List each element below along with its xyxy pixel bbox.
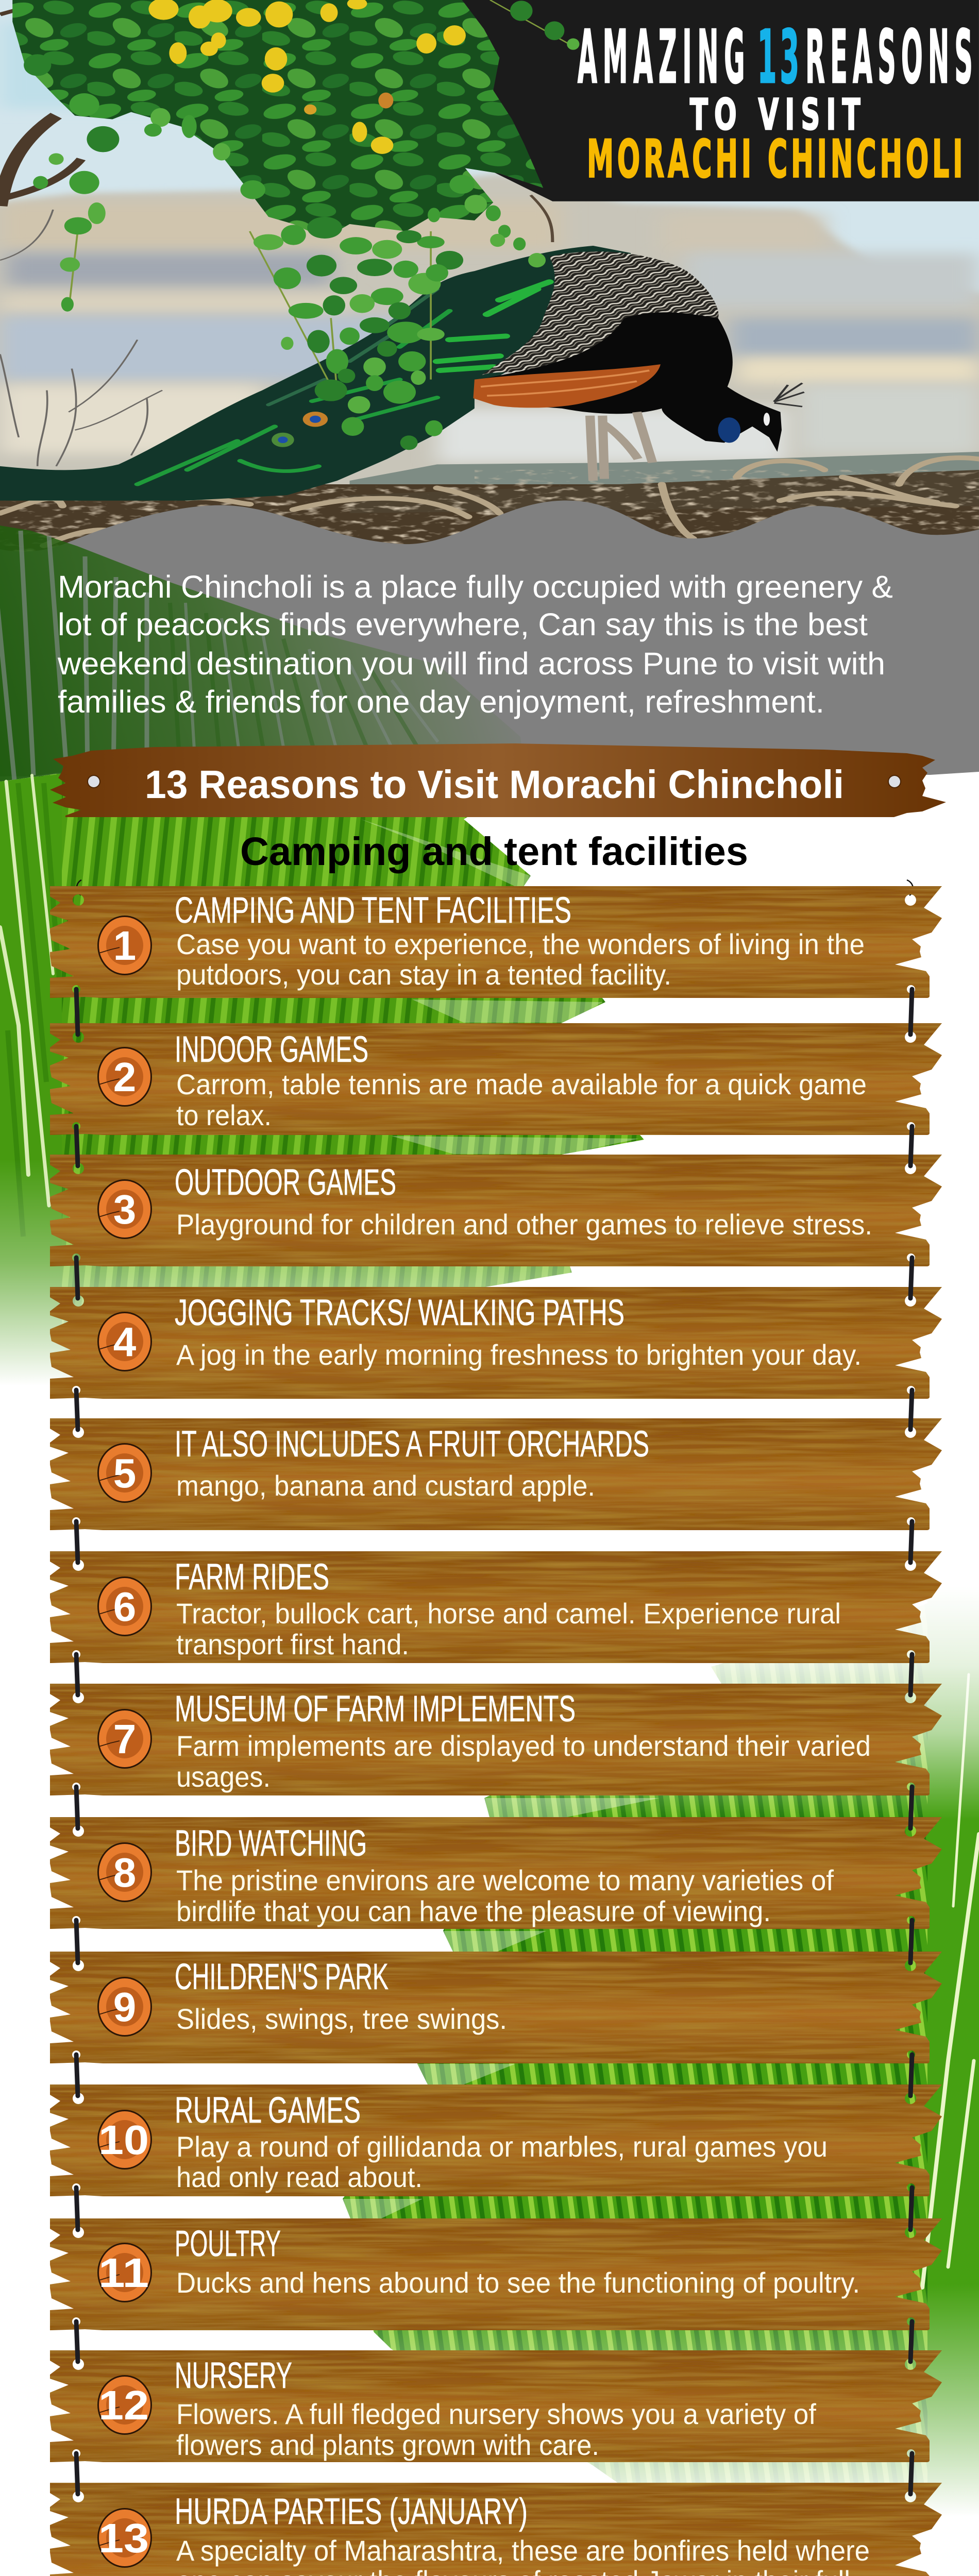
plank 2: Carrom, table tennis are made available for a quick game <box>176 1068 867 1100</box>
tree branches <box>0 10 552 242</box>
plank 9: CHILDREN'S PARK <box>175 1957 389 1997</box>
plank 11: POULTRY <box>175 2224 281 2264</box>
badge 7: 7 <box>113 1716 136 1762</box>
plank 3 <box>50 1155 942 1266</box>
badge 6: 6 <box>113 1584 136 1630</box>
plank 12: Flowers. A full fledged nursery shows you a variety of <box>176 2398 816 2430</box>
hero photo: peacock under hanging foliage <box>0 0 979 578</box>
plank 4: JOGGING TRACKS/ WALKING PATHS <box>175 1293 624 1333</box>
plank 1 <box>50 886 942 998</box>
badge 4: 4 <box>113 1319 137 1365</box>
badge 12: 12 <box>98 2382 149 2428</box>
bare branches <box>0 210 162 466</box>
dark palm overlay on gray <box>0 526 526 782</box>
peacock orange wing <box>473 364 661 408</box>
intro text: families & friends for one day enjoyment, refreshment. <box>58 684 824 719</box>
title line 1: 13 <box>757 15 799 100</box>
plank 2 <box>50 1023 942 1135</box>
plank 8 <box>50 1817 942 1929</box>
badge 2: 2 <box>113 1054 136 1100</box>
peacock legs <box>590 412 652 481</box>
plank 7: Farm implements are displayed to understand their varied <box>176 1730 871 1762</box>
plank 7 <box>50 1684 942 1795</box>
badge 4 <box>97 1312 152 1371</box>
palm frond right <box>343 1582 979 2555</box>
badge 1 <box>97 916 152 975</box>
plank 4 <box>50 1287 942 1399</box>
title line 1: REASONS <box>805 15 973 100</box>
plank 5: mango, banana and custard apple. <box>176 1469 595 1502</box>
plank 7: usages. <box>176 1760 271 1793</box>
plank 11: Ducks and hens abound to see the functioning of poultry. <box>176 2266 860 2299</box>
badge 9 <box>97 1977 152 2037</box>
foliage canopy <box>12 0 543 239</box>
intro text <box>57 569 893 719</box>
plank 13: HURDA PARTIES (JANUARY) <box>175 2492 528 2532</box>
palm frond left <box>0 526 644 1391</box>
badge 10 <box>97 2110 152 2170</box>
intro text: lot of peacocks finds everywhere, Can say this is the best <box>58 607 868 642</box>
plank 5 <box>50 1418 942 1530</box>
badge 9: 9 <box>113 1984 136 2030</box>
intro text: weekend destination you will find across Pune to visit with <box>57 646 885 681</box>
title line 1 <box>578 15 973 100</box>
plank 1: putdoors, you can stay in a tented facility. <box>176 958 671 991</box>
plank 4: A jog in the early morning freshness to brighten your day. <box>176 1338 862 1371</box>
plank 1: CAMPING AND TENT FACILITIES <box>175 890 571 931</box>
plank 2: to relax. <box>176 1099 272 1131</box>
plank 12: NURSERY <box>175 2355 292 2396</box>
plank 8: birdlife that you can have the pleasure of viewing. <box>176 1895 771 1927</box>
plank 13: A specialty of Maharashtra, these are bonfires held where <box>176 2534 870 2567</box>
peacock tail <box>0 246 637 501</box>
plank 5: IT ALSO INCLUDES A FRUIT ORCHARDS <box>175 1424 649 1465</box>
plank 10: had only read about. <box>176 2161 423 2193</box>
plank 10: Play a round of gillidanda or marbles, rural games you <box>176 2130 828 2163</box>
badge 13: 13 <box>98 2515 149 2561</box>
badge 7 <box>97 1709 152 1769</box>
plank 6 <box>50 1551 942 1663</box>
badge 8: 8 <box>113 1850 136 1895</box>
badge 6 <box>97 1577 152 1636</box>
badge 2 <box>97 1047 152 1107</box>
sky and hills backdrop <box>0 0 979 484</box>
intro text: Morachi Chincholi is a place fully occupied with greenery & <box>58 569 893 604</box>
peacock back feathers <box>481 251 719 376</box>
plank 12 <box>50 2350 942 2462</box>
plank 1: Case you want to experience, the wonders of living in the <box>176 928 865 960</box>
black title panel shape <box>368 0 979 201</box>
plank 6: transport first hand. <box>176 1628 409 1660</box>
bright palm leaf <box>0 774 644 1391</box>
banner: 13 reasons: 13 Reasons to Visit Morachi Chincholi <box>145 762 844 807</box>
gray wave edge <box>0 500 979 567</box>
plank 7: MUSEUM OF FARM IMPLEMENTS <box>175 1689 576 1730</box>
plank 9 <box>50 1952 942 2063</box>
plank 10: RURAL GAMES <box>175 2090 361 2131</box>
plank 11 <box>50 2218 942 2330</box>
title line 2: TO VISIT <box>690 90 860 140</box>
title line 3: MORACHI CHINCHOLI <box>587 129 963 190</box>
gray intro background <box>0 564 979 776</box>
badge 12 <box>97 2375 152 2435</box>
badge 3 <box>97 1179 152 1239</box>
plank 2: INDOOR GAMES <box>175 1029 368 1070</box>
badge 11: 11 <box>98 2250 149 2296</box>
section heading: Camping and tent facilities <box>240 829 748 874</box>
plank 13 <box>50 2483 943 2576</box>
plank 10 <box>50 2084 942 2196</box>
badge 5: 5 <box>113 1450 136 1496</box>
badge 5 <box>97 1443 152 1503</box>
badge 10: 10 <box>98 2117 149 2163</box>
plank 8: The pristine environs are welcome to many varieties of <box>176 1864 834 1896</box>
plank 8: BIRD WATCHING <box>175 1823 367 1864</box>
badge 1: 1 <box>113 923 136 969</box>
plank 9: Slides, swings, tree swings. <box>176 2003 507 2035</box>
plank 12: flowers and plants grown with care. <box>176 2429 599 2461</box>
plank 6: FARM RIDES <box>175 1557 329 1598</box>
banner: 13 reasons <box>50 743 946 817</box>
hanging leaves <box>24 0 579 450</box>
badge 8 <box>97 1842 152 1902</box>
badge 3: 3 <box>113 1187 136 1232</box>
peacock body and neck <box>475 312 782 452</box>
badge 13 <box>97 2508 152 2568</box>
plank 6: Tractor, bullock cart, horse and camel. Experience rural <box>176 1597 841 1630</box>
plank 3: OUTDOOR GAMES <box>175 1162 396 1203</box>
tangled roots ground <box>0 458 979 567</box>
peacock <box>0 246 804 501</box>
yellow flowers <box>148 0 466 154</box>
hanging ropes <box>76 989 912 2494</box>
hanging hooks <box>77 880 913 895</box>
badge 11 <box>97 2243 152 2302</box>
title panel text <box>578 15 973 190</box>
title line 1: AMAZING <box>578 15 745 100</box>
plank 3: Playground for children and other games to relieve stress. <box>176 1208 872 1241</box>
